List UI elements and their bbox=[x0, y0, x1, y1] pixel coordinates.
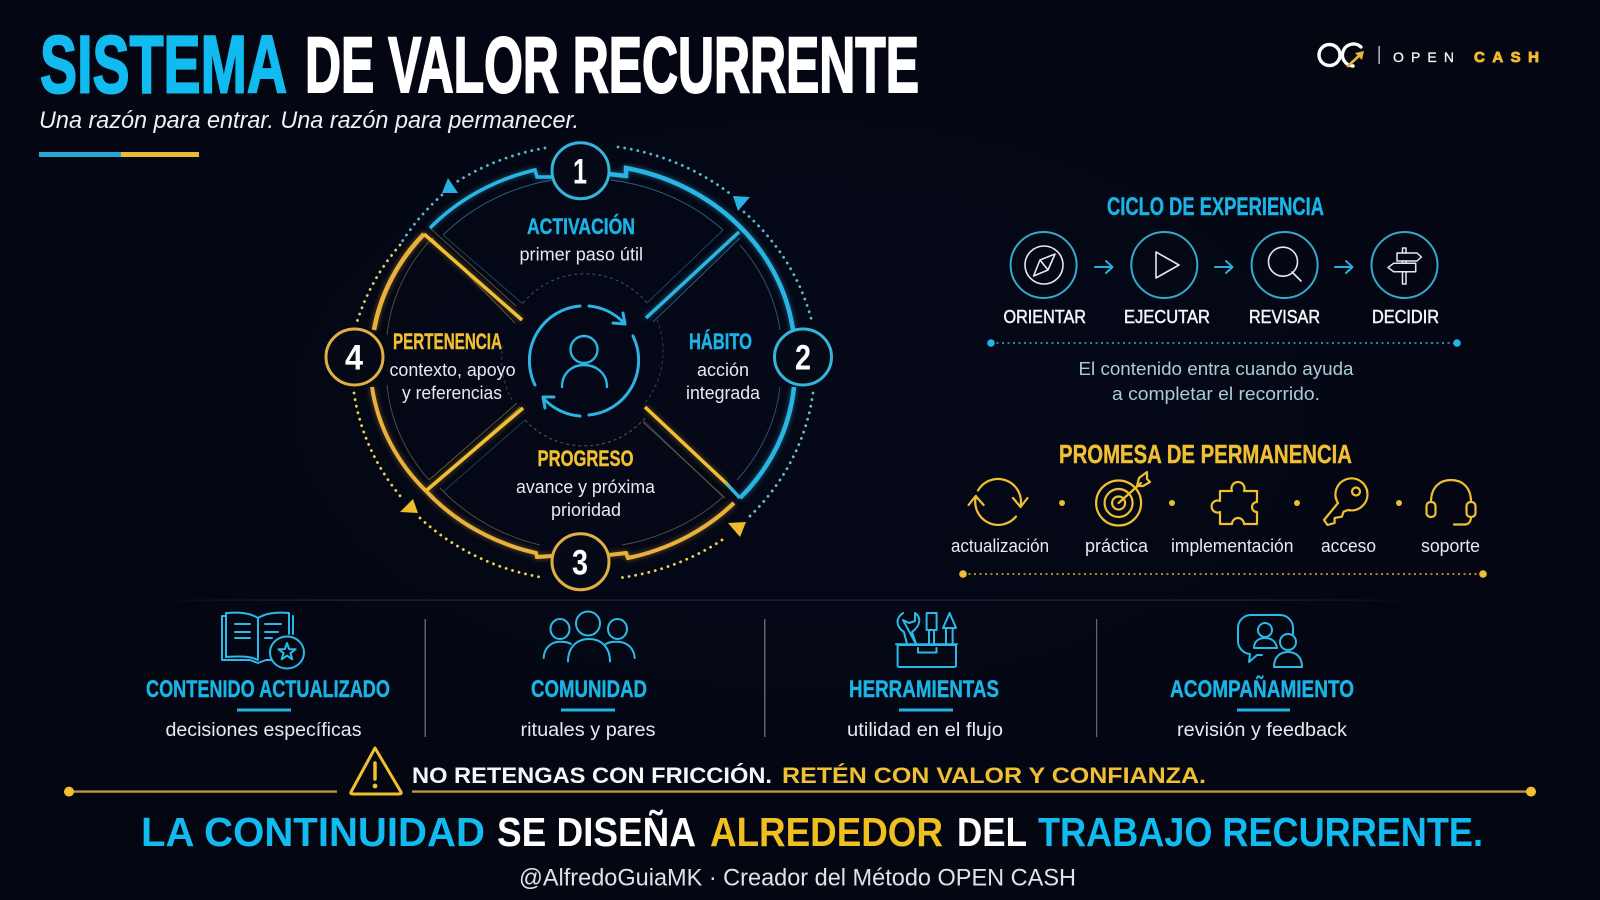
node 1 bbox=[552, 143, 609, 199]
closing statement: TRABAJO RECURRENTE. bbox=[1038, 809, 1483, 855]
icon: warning triangle bbox=[351, 748, 401, 794]
logo: open cash bbox=[1319, 44, 1539, 66]
item: implementación bbox=[1171, 482, 1294, 556]
segment text: activación: primer paso útil bbox=[520, 244, 643, 264]
step: ejecutar: EJECUTAR bbox=[1124, 307, 1210, 327]
spoke colour blend bbox=[725, 482, 740, 498]
center icon: person with cycle arrows bbox=[529, 306, 639, 416]
gold segments bbox=[372, 234, 734, 558]
segment text: hábito: HÁBITO bbox=[689, 329, 752, 354]
segment text: pertenencia bbox=[390, 329, 516, 403]
pillar: contenido actualizado: CONTENIDO ACTUALIZADO bbox=[146, 676, 390, 703]
subtitle: Una razón para entrar. Una razón para permanecer. bbox=[39, 107, 579, 134]
item: actualización: actualización bbox=[951, 536, 1049, 556]
title: DE VALOR RECURRENTE bbox=[305, 21, 919, 109]
item: práctica: práctica bbox=[1085, 536, 1149, 556]
warning banner bbox=[64, 748, 1536, 797]
panel: ciclo de experiencia bbox=[987, 193, 1461, 404]
faint inner guide lines bbox=[387, 180, 780, 545]
segment text: hábito: acción bbox=[697, 359, 749, 380]
step: revisar: REVISAR bbox=[1249, 307, 1320, 327]
segment text: progreso: avance y próxima bbox=[516, 476, 656, 497]
heading: PROMESA DE PERMANENCIA bbox=[1059, 439, 1352, 469]
step: orientar bbox=[1004, 232, 1086, 327]
node 4 bbox=[326, 329, 383, 385]
logo: open cash: CASH bbox=[1474, 49, 1539, 66]
node 3: 3 bbox=[572, 544, 588, 582]
pillar: acompañamiento: revisión y feedback bbox=[1177, 720, 1348, 741]
closing statement: DEL bbox=[957, 809, 1027, 855]
segment text: progreso: PROGRESO bbox=[538, 446, 634, 471]
closing statement: ALREDEDOR bbox=[710, 809, 943, 855]
description bbox=[1078, 358, 1354, 404]
item: práctica bbox=[1085, 472, 1150, 556]
pillar: contenido actualizado: decisiones específicas bbox=[166, 720, 362, 741]
pillar: acompañamiento bbox=[1170, 615, 1354, 741]
icon: people bbox=[544, 612, 635, 662]
icon: chat with people bbox=[1238, 615, 1302, 667]
heading: CICLO DE EXPERIENCIA bbox=[1107, 193, 1324, 221]
description: a completar el recorrido. bbox=[1112, 383, 1320, 404]
separator dot bbox=[1059, 500, 1065, 506]
item: acceso: acceso bbox=[1321, 536, 1376, 556]
node 3 bbox=[552, 534, 609, 590]
title: SISTEMA bbox=[40, 20, 287, 110]
dotted timeline bbox=[987, 339, 1461, 347]
step: orientar: ORIENTAR bbox=[1004, 307, 1086, 327]
title accent bar bbox=[39, 152, 199, 157]
segment text: pertenencia: PERTENENCIA bbox=[393, 329, 502, 354]
step: decidir bbox=[1372, 232, 1439, 327]
footer credit: @AlfredoGuiaMK · Creador del Método OPEN CASH bbox=[519, 864, 1076, 892]
pillar: acompañamiento: ACOMPAÑAMIENTO bbox=[1170, 675, 1354, 703]
step: decidir: DECIDIR bbox=[1372, 307, 1439, 327]
pillar: herramientas: HERRAMIENTAS bbox=[849, 676, 999, 703]
arrow bbox=[1335, 261, 1352, 273]
pillar: herramientas: utilidad en el flujo bbox=[847, 720, 1003, 741]
pillar: comunidad bbox=[520, 612, 656, 741]
closing statement: SE DISEÑA bbox=[497, 809, 696, 855]
arrow bbox=[1215, 261, 1232, 273]
item: actualización bbox=[951, 479, 1049, 556]
node 2: 2 bbox=[795, 338, 811, 378]
node 2 bbox=[774, 329, 832, 385]
logo: open cash: OPEN bbox=[1393, 49, 1454, 65]
segment text: activación: ACTIVACIÓN bbox=[527, 214, 635, 239]
outer dotted arrows bbox=[354, 147, 813, 578]
description: El contenido entra cuando ayuda bbox=[1078, 358, 1354, 379]
segment text: activación bbox=[520, 214, 643, 264]
icon: open book with star bbox=[222, 613, 304, 668]
node 4: 4 bbox=[345, 338, 363, 378]
warning banner: NO RETENGAS CON FRICCIÓN. bbox=[412, 763, 772, 788]
pillar: comunidad: rituales y pares bbox=[520, 720, 656, 741]
segment text: pertenencia: y referencias bbox=[402, 382, 502, 403]
title bbox=[40, 20, 919, 110]
warning banner: RETÉN CON VALOR Y CONFIANZA. bbox=[782, 763, 1206, 788]
cycle wheel bbox=[326, 143, 832, 590]
node 1: 1 bbox=[573, 152, 587, 192]
pillar: contenido actualizado bbox=[146, 613, 390, 741]
closing statement: LA CONTINUIDAD bbox=[141, 809, 485, 855]
dotted arrowheads bbox=[400, 178, 750, 537]
gold rule bbox=[64, 787, 1536, 797]
step: revisar bbox=[1249, 232, 1320, 327]
panel: promesa de permanencia bbox=[951, 439, 1487, 578]
closing statement bbox=[141, 809, 1483, 855]
pillar: comunidad: COMUNIDAD bbox=[531, 676, 647, 703]
item: implementación: implementación bbox=[1171, 536, 1294, 556]
separator dot bbox=[1396, 500, 1402, 506]
segment text: pertenencia: contexto, apoyo bbox=[390, 359, 516, 380]
arrow bbox=[1095, 261, 1112, 273]
segment text: progreso bbox=[516, 446, 656, 520]
blue segments bbox=[430, 168, 794, 498]
segment text: hábito bbox=[686, 329, 761, 403]
dotted timeline bbox=[959, 570, 1487, 578]
segment text: hábito: integrada bbox=[686, 382, 761, 403]
separator dot bbox=[1294, 500, 1300, 506]
segment text: progreso: prioridad bbox=[551, 499, 621, 520]
item: acceso bbox=[1321, 478, 1376, 556]
item: soporte: soporte bbox=[1421, 536, 1480, 556]
icon: toolbox bbox=[896, 613, 957, 667]
pillar: herramientas bbox=[847, 613, 1003, 741]
separator dot bbox=[1169, 500, 1175, 506]
step: ejecutar bbox=[1124, 232, 1210, 327]
item: soporte bbox=[1421, 480, 1480, 556]
